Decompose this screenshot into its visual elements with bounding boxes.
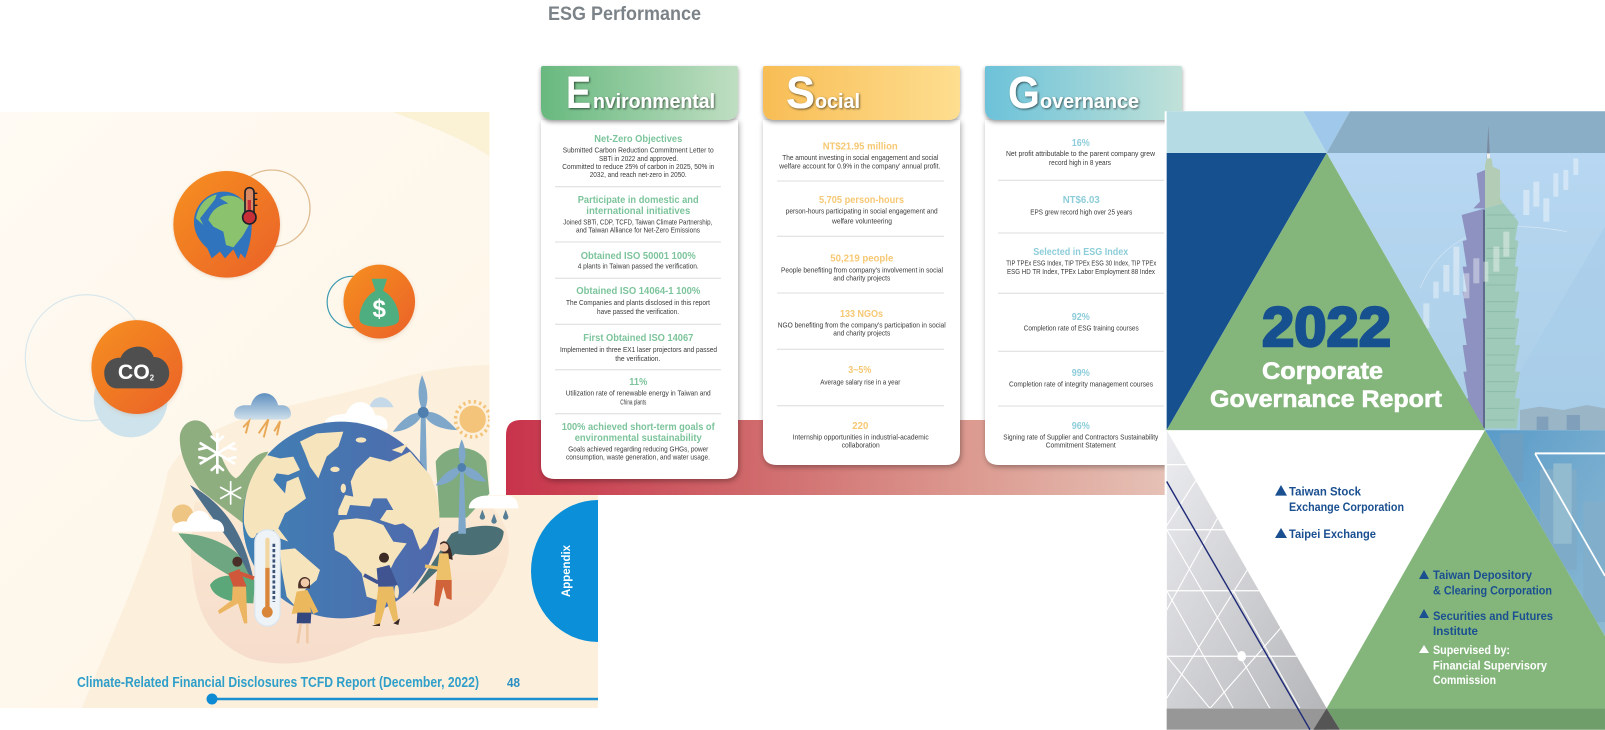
- affiliates list: Financial Supervisory: [1433, 658, 1547, 672]
- item: Net-Zero Objectives: Net-Zero Objectives: [594, 134, 682, 145]
- cover title: 2022: [1262, 295, 1391, 358]
- lattice triangle: [1167, 430, 1327, 708]
- icon: thermometer globe badge: [173, 170, 310, 278]
- exchange list: [1275, 485, 1404, 541]
- panel background and blobs: [0, 112, 598, 708]
- affiliates list: Commission: [1433, 673, 1496, 687]
- item: Net-Zero Objectives: 2032, and reach net-zero in 2050.: [590, 170, 687, 179]
- panel: Environmental: [541, 66, 738, 479]
- item: renewable energy: China plants: [620, 397, 647, 406]
- Governance header: G: [1008, 67, 1040, 118]
- item: 99% integrity: [1009, 368, 1153, 389]
- heading: ESG Performance: ESG Performance: [548, 4, 701, 25]
- item: 96% signing: [1003, 421, 1159, 450]
- affiliates list: & Clearing Corporation: [1433, 583, 1552, 597]
- item: 50,219 people: and charity projects: [833, 273, 891, 282]
- affiliates list: Taiwan Depository: [1433, 568, 1532, 582]
- Governance header: [985, 66, 1182, 120]
- Governance header: overnance: [1040, 91, 1139, 113]
- appendix tab: Appendix: [561, 544, 573, 597]
- item: EPS: EPS grew record high over 25 years: [1030, 207, 1133, 216]
- item: 16% net profit: Net profit attributable to the parent company grew: [1006, 149, 1156, 158]
- item: Net-Zero Objectives: SBTi in 2022 and approved.: [599, 154, 678, 163]
- item: 96% signing: Commitment Statement: [1046, 441, 1116, 450]
- exchange list: Taipei Exchange: [1289, 527, 1376, 541]
- icon: money bag badge: $: [373, 296, 386, 323]
- item: ESG index: ESG HD TR Index, TPEx Labor Employment 88 Index: [1007, 267, 1155, 276]
- icon: thermometer: [255, 530, 280, 626]
- item: ISO 14064-1: The Companies and plants disclosed in this report: [566, 298, 710, 307]
- item: short-term goals: environmental sustainability: [575, 433, 702, 444]
- Environmental header: nvironmental: [593, 91, 715, 113]
- red background band: [506, 420, 1170, 495]
- item: renewable energy: Utilization rate of renewable energy in Taiwan and: [566, 388, 711, 397]
- item: 133 NGOs: [778, 309, 946, 338]
- item: 50,219 people: People benefiting from company's involvement in social: [781, 265, 943, 274]
- item: short-term goals: [562, 422, 715, 462]
- icon: globe: [243, 422, 439, 618]
- item: Net-Zero Objectives: [562, 134, 714, 179]
- item: 99% integrity: 99%: [1072, 368, 1090, 379]
- item: internships: [793, 421, 929, 450]
- Environmental header: [541, 66, 738, 120]
- icon: CO2 cloud badge: [25, 295, 182, 437]
- icon: small wind turbine: [436, 439, 486, 534]
- report footer caption: 48: [507, 676, 520, 690]
- item: initiatives: Joined SBTi, CDP, TCFD, Taiwan Climate Partnership,: [563, 218, 712, 226]
- Social header: ocial: [815, 91, 860, 113]
- icon: CO2 cloud badge: 2: [150, 373, 155, 382]
- item: salary rise: 3~5%: [848, 365, 871, 376]
- Taipei 101 and candlestick chart: [1420, 125, 1605, 430]
- panel: Social: [763, 66, 960, 465]
- icon: four people: [218, 541, 453, 643]
- item: 5,705 person-hours: welfare volunteering: [831, 216, 892, 225]
- item: short-term goals: Goals achieved regarding reducing GHGs, power: [568, 445, 709, 454]
- item: 133 NGOs: NGO benefiting from the company's participation in social: [778, 321, 946, 330]
- icon: clouds, sun and rain: [234, 393, 518, 524]
- icon: money bag badge: [327, 265, 415, 339]
- item: ISO 14067: [560, 333, 717, 363]
- item: 92% training: 92%: [1072, 312, 1090, 323]
- item: EPS: NT$6.03: [1063, 195, 1100, 206]
- item: internships: collaboration: [842, 441, 880, 450]
- affiliates list: [1419, 568, 1553, 687]
- item: ISO 14064-1: [566, 286, 710, 316]
- item: 5,705 person-hours: person-hours participating in social engagement and: [786, 207, 938, 216]
- item: NT$21.95 million: welfare account for 0.9% in the company' annual profit.: [778, 161, 940, 170]
- cover title: Governance Report: [1210, 386, 1442, 413]
- item: initiatives: and Taiwan Alliance for Net-Zero Emissions: [576, 226, 700, 235]
- exchange list: Exchange Corporation: [1289, 500, 1404, 514]
- item: 50,219 people: [781, 254, 943, 282]
- item: ESG index: Selected in ESG Index: [1033, 247, 1128, 258]
- item: 5,705 person-hours: [786, 195, 938, 225]
- cover title: [1210, 295, 1442, 413]
- item: 133 NGOs: 133 NGOs: [840, 309, 883, 320]
- item: 133 NGOs: and charity projects: [833, 329, 891, 338]
- item: renewable energy: 11%: [629, 377, 647, 388]
- item: renewable energy: [566, 377, 711, 406]
- exchange list: Taiwan Stock: [1289, 485, 1361, 499]
- item: NT$21.95 million: The amount investing in social engagement and social: [782, 153, 939, 162]
- city skyline: [1500, 433, 1605, 622]
- item: EPS: [1030, 195, 1133, 216]
- item: 50,219 people: 50,219 people: [830, 254, 894, 265]
- affiliates list: Securities and Futures: [1433, 609, 1553, 623]
- icon: large wind turbine: [393, 375, 457, 472]
- item: ESG index: TIP TPEx ESG Index, TIP TPEx ESG 30 Index, TIP TPEx: [1006, 259, 1157, 268]
- item: ISO 14064-1: have passed the verification.: [597, 307, 679, 316]
- item: Net-Zero Objectives: Committed to reduce 25% of carbon in 2025, 50% in: [562, 162, 714, 171]
- item: initiatives: [563, 195, 712, 235]
- panel: Governance: [985, 66, 1182, 465]
- icon: CO2 cloud badge: CO: [118, 361, 150, 384]
- item: 96% signing: Signing rate of Supplier and Contractors Sustainability: [1003, 432, 1159, 441]
- item: initiatives: international initiatives: [586, 206, 690, 217]
- item: initiatives: Participate in domestic and: [578, 195, 699, 206]
- item: short-term goals: 100% achieved short-term goals of: [562, 422, 715, 433]
- item: ISO 14067: Implemented in three EX1 laser projectors and passed: [560, 345, 717, 354]
- item: 99% integrity: Completion rate of integrity management courses: [1009, 380, 1153, 389]
- panel: climate report cover: [0, 112, 598, 708]
- item: internships: Internship opportunities in industrial-academic: [793, 433, 929, 442]
- Social header: [763, 66, 960, 120]
- item: Net-Zero Objectives: Submitted Carbon Reduction Commitment Letter to: [563, 146, 714, 155]
- cover top band and sky: [1165, 111, 1605, 730]
- item: 16% net profit: 16%: [1072, 138, 1090, 149]
- item: 16% net profit: record high in 8 years: [1049, 158, 1111, 167]
- item: internships: 220: [852, 421, 868, 432]
- item: 16% net profit: [1006, 138, 1156, 167]
- Social header: S: [786, 67, 815, 118]
- report footer caption: [77, 675, 598, 704]
- cover title: Corporate: [1262, 358, 1383, 385]
- Environmental header: E: [566, 67, 591, 118]
- item: short-term goals: consumption, waste generation, and water usage.: [566, 453, 710, 462]
- item: 96% signing: 96%: [1072, 421, 1090, 432]
- item: ISO 14064-1: Obtained ISO 14064-1 100%: [576, 286, 700, 297]
- item: ISO 14067: the verification.: [615, 354, 660, 363]
- affiliates list: Supervised by:: [1433, 643, 1510, 657]
- item: ISO 50001: Obtained ISO 50001 100%: [581, 251, 696, 262]
- item: NT$21.95 million: [778, 142, 940, 170]
- cover triangles: [1167, 153, 1605, 730]
- icon: leaves and snowflakes: [172, 420, 268, 603]
- item: 92% training: Completion rate of ESG training courses: [1024, 324, 1139, 333]
- item: salary rise: Average salary rise in a year: [820, 377, 901, 386]
- item: ISO 50001: [578, 251, 699, 271]
- item: 92% training: [1024, 312, 1139, 333]
- appendix tab: [531, 500, 598, 642]
- item: salary rise: [820, 365, 901, 386]
- item: 5,705 person-hours: 5,705 person-hours: [819, 195, 904, 206]
- panel: corporate governance report cover: [1165, 111, 1605, 730]
- affiliates list: Institute: [1433, 624, 1478, 638]
- item: ISO 50001: 4 plants in Taiwan passed the verification.: [578, 262, 699, 271]
- item: ESG index: [1006, 247, 1157, 276]
- item: NT$21.95 million: NT$21.95 million: [823, 142, 898, 153]
- item: ISO 14067: First Obtained ISO 14067: [583, 333, 693, 344]
- report footer caption: Climate-Related Financial Disclosures TCFD Report (December, 2022): [77, 675, 479, 691]
